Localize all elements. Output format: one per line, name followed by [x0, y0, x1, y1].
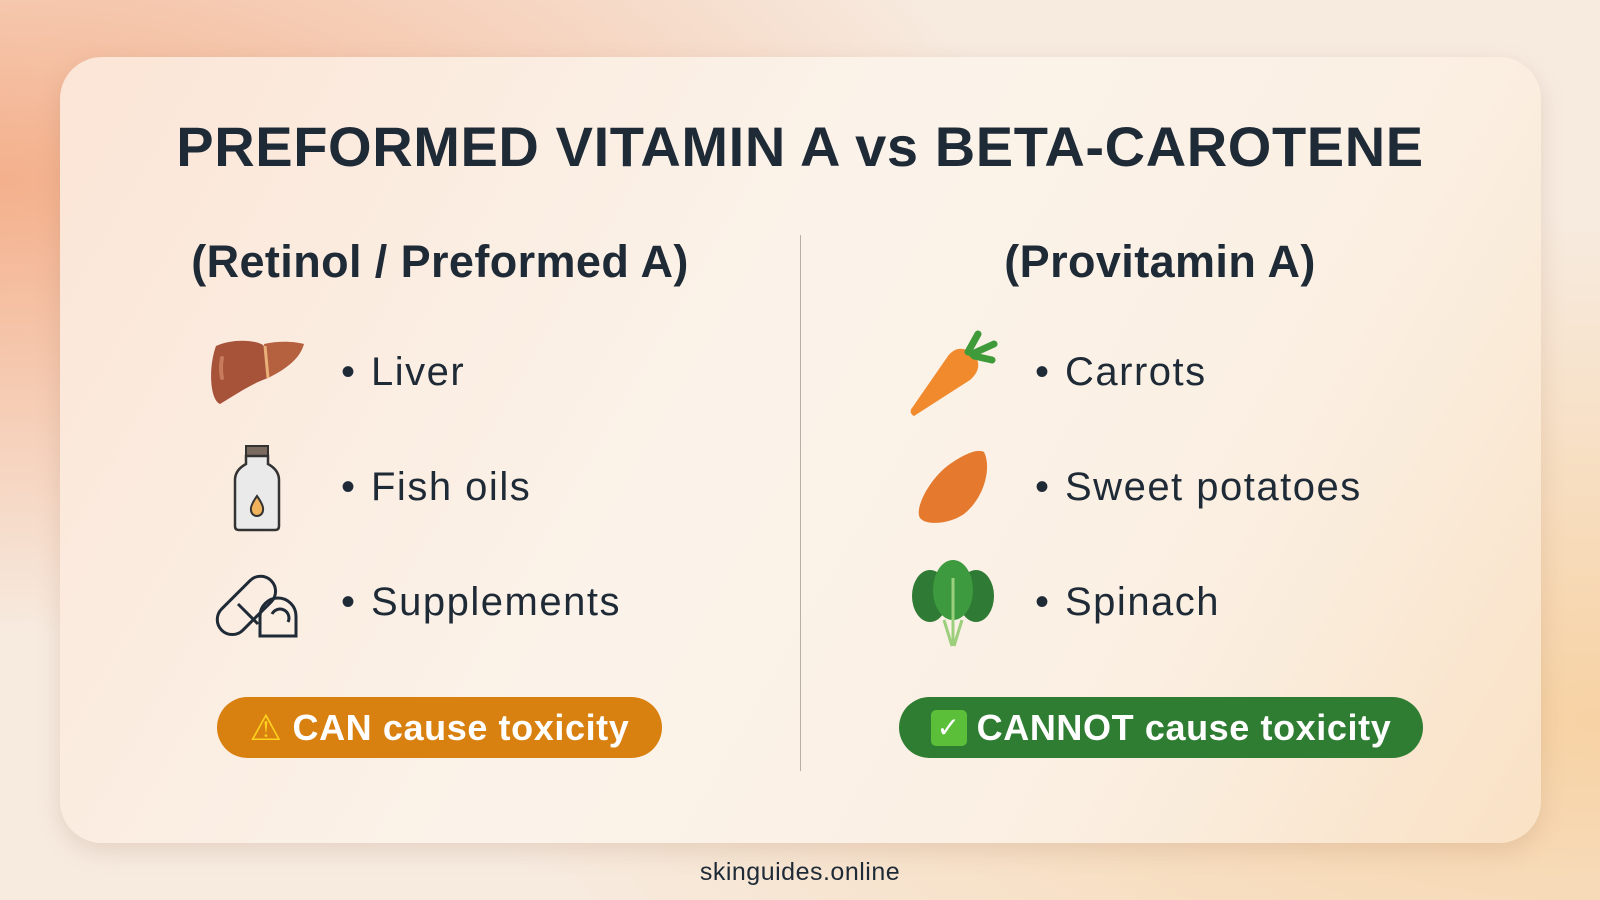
icon: carrot — [910, 330, 998, 416]
subheading left: (Retinol / Preformed A) — [191, 236, 689, 287]
pill: cannot cause toxicity: CANNOT cause toxicity — [977, 706, 1391, 748]
pill: can cause toxicity — [217, 697, 662, 758]
item: supplements: Supplements — [371, 580, 621, 624]
item: spinach: Spinach — [1065, 580, 1220, 624]
text: • — [341, 350, 357, 394]
pill: cannot cause toxicity — [899, 697, 1423, 758]
item: carrots: Carrots — [1065, 350, 1207, 394]
item: fish oils: Fish oils — [371, 465, 531, 509]
divider — [800, 235, 801, 771]
subheading right: (Provitamin A) — [1004, 236, 1316, 287]
item: liver: Liver — [371, 350, 465, 394]
footer: skinguides.online — [700, 858, 900, 886]
icon: fish oil bottle — [234, 445, 280, 532]
icon: sweet potato — [918, 450, 988, 523]
icon: liver — [211, 340, 304, 404]
text: • — [341, 580, 357, 624]
text: • — [1035, 580, 1051, 624]
pill: can cause toxicity: ⚠ — [250, 706, 282, 748]
text: • — [341, 465, 357, 509]
pill: cannot cause toxicity: ✓ — [937, 712, 961, 743]
icon: pills — [216, 574, 298, 638]
title: PREFORMED VITAMIN A vs BETA-CAROTENE — [176, 115, 1424, 178]
text: • — [1035, 350, 1051, 394]
pill: can cause toxicity: CAN cause toxicity — [292, 706, 629, 748]
icon: spinach — [912, 560, 994, 646]
item: sweet potatoes: Sweet potatoes — [1065, 465, 1362, 509]
text: • — [1035, 465, 1051, 509]
